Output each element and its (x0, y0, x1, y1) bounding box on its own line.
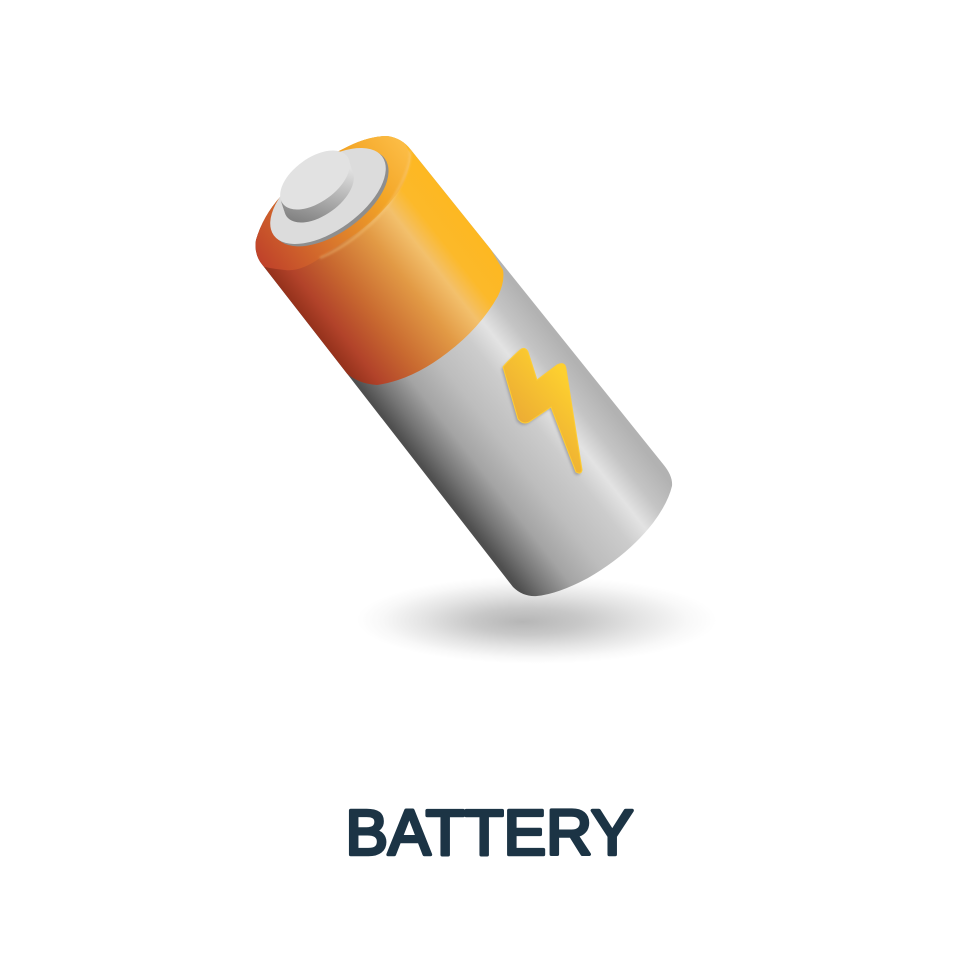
button top face (270, 139, 360, 221)
battery silver body (256, 136, 672, 596)
battery illustration (240, 120, 672, 596)
ground shadow (357, 576, 717, 664)
battery infographic canvas (256, 136, 686, 856)
button cylinder side (271, 143, 364, 234)
cap rounded top lip (256, 136, 411, 270)
battery orange cap (256, 136, 504, 385)
lightning bolt icon (502, 348, 582, 475)
title: BATTERY (346, 796, 634, 868)
terminal button (270, 139, 364, 234)
washer terminal base (254, 129, 405, 266)
cap lip highlight (320, 150, 410, 258)
